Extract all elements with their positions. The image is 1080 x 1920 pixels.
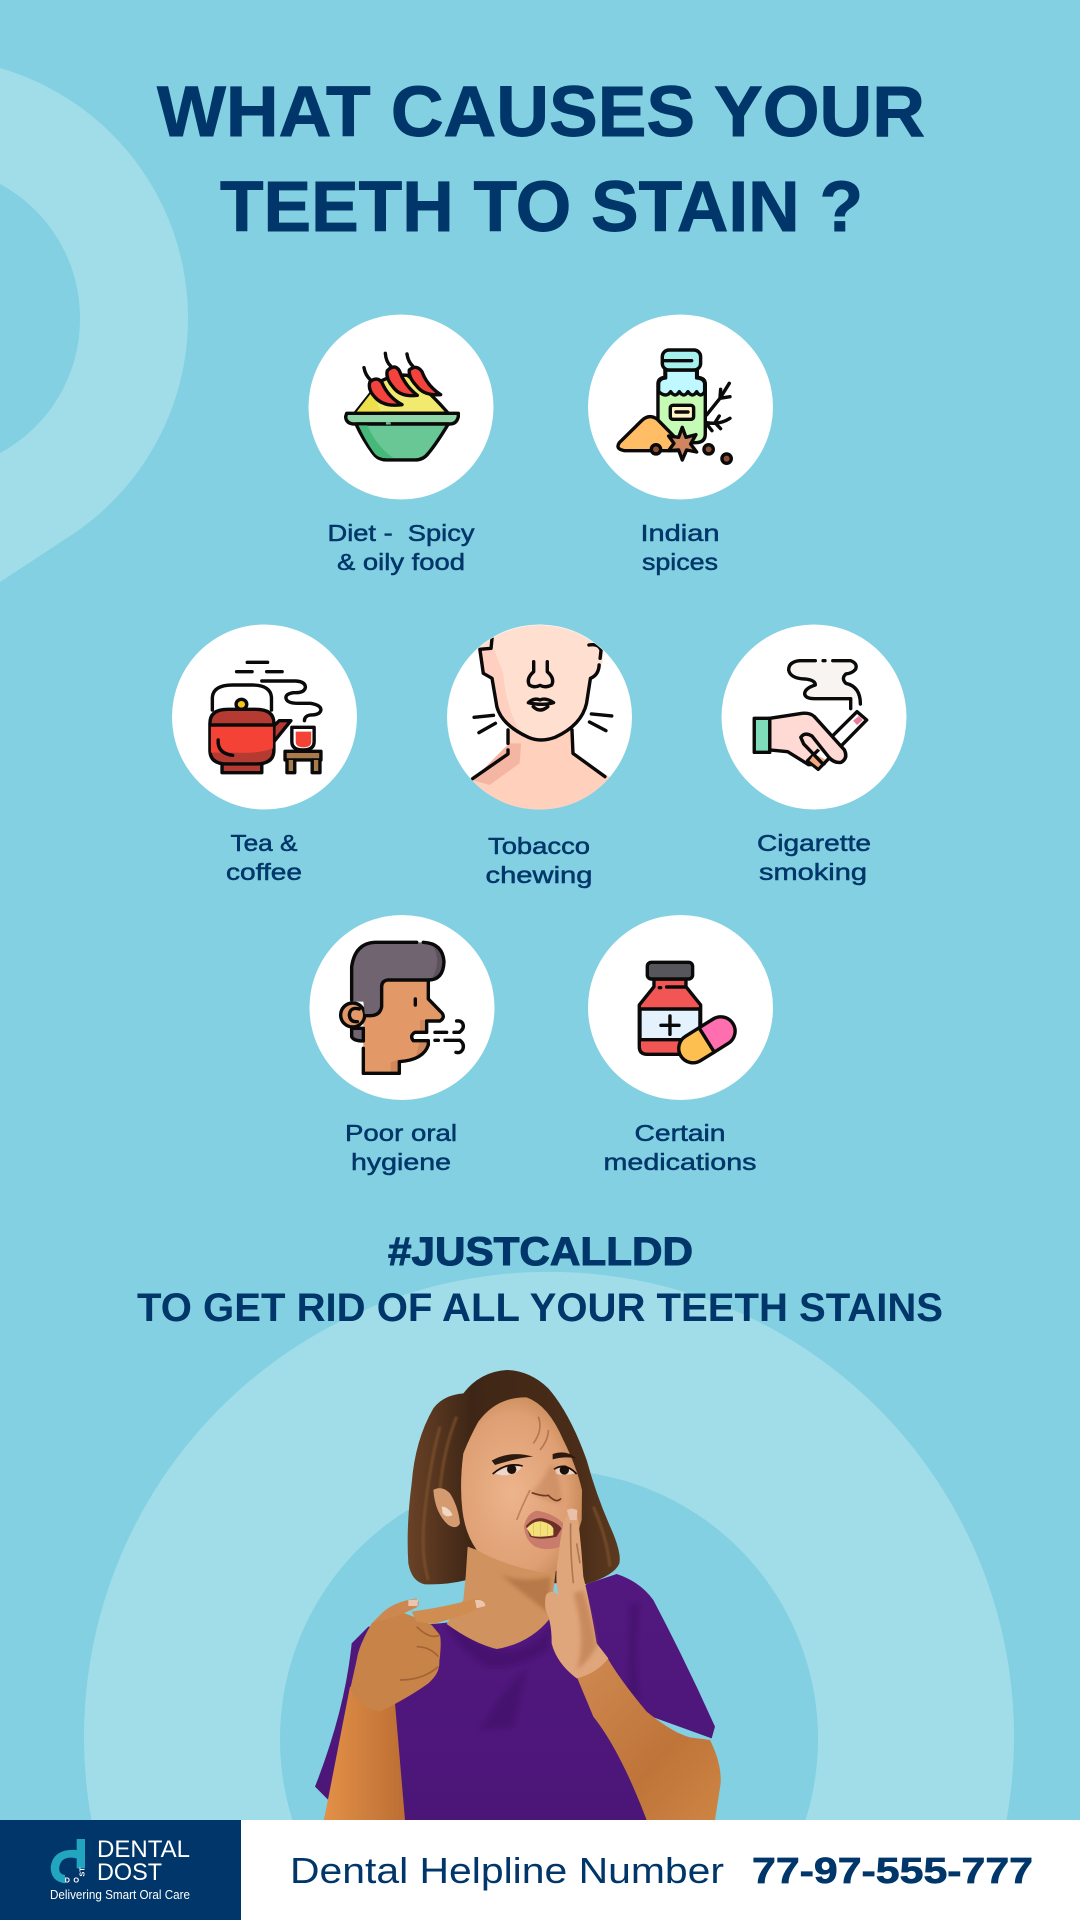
logo mark: ST [78, 1867, 87, 1877]
label: Indian spices: spices [642, 549, 718, 575]
pointing fist [350, 1612, 441, 1712]
label: tobacco chewing: Tobacco [488, 833, 590, 859]
logo panel: Delivering Smart Oral Care [50, 1888, 190, 1902]
logo mark: O [73, 1875, 79, 1884]
logo panel: DOST [97, 1859, 162, 1886]
logo panel: DENTAL [97, 1836, 190, 1863]
title: TEETH TO STAIN ? [220, 168, 863, 247]
item: diet [308, 314, 494, 575]
decorative bottom rings [84, 1272, 1014, 1820]
eyebrows and eyes [492, 1452, 576, 1465]
item: tea and coffee [172, 624, 357, 885]
decorative teardrop ring top left [0, 68, 188, 582]
label: cigarette smoking: Cigarette [757, 830, 871, 856]
label: medications: medications [604, 1149, 756, 1175]
mouth with yellow teeth [524, 1511, 563, 1549]
label: tea and coffee: coffee [226, 859, 302, 885]
label: diet: & oily food [337, 549, 465, 575]
raised hand [545, 1508, 608, 1678]
call to action: TO GET RID OF ALL YOUR TEETH STAINS [137, 1286, 943, 1330]
icon circle: teapot [172, 624, 357, 810]
item: poor oral hygiene [310, 915, 494, 1175]
icon circle: spicy food bowl [308, 314, 494, 500]
icon circle: medicine bottle and pill [588, 915, 773, 1100]
logo mark: D [65, 1875, 70, 1884]
label: diet: Diet - Spicy [328, 520, 475, 546]
photo: woman pointing at stained teeth [315, 1370, 721, 1820]
hair [408, 1370, 620, 1584]
icon circle: face and neck [447, 620, 632, 817]
item: tobacco chewing [447, 620, 632, 888]
right forearm [577, 1657, 721, 1820]
face [461, 1397, 582, 1572]
icon circle: spice jar [588, 314, 773, 500]
shirt [315, 1574, 715, 1820]
call to action [137, 1230, 943, 1330]
nose [532, 1465, 561, 1503]
left forearm [324, 1687, 405, 1820]
item: cigarette smoking [722, 624, 906, 885]
ear [433, 1488, 460, 1527]
helpline: Dental Helpline Number [290, 1850, 724, 1891]
label: poor oral hygiene: hygiene [351, 1149, 451, 1175]
label: cigarette smoking: smoking [759, 859, 867, 885]
wrinkles [533, 1417, 548, 1450]
label: tobacco chewing: chewing [486, 862, 592, 888]
neck [447, 1547, 557, 1649]
item: medications [588, 915, 773, 1175]
title: WHAT CAUSES YOUR [157, 73, 925, 152]
icon circle: hand with cigarette [722, 624, 906, 810]
item: Indian spices [588, 314, 773, 575]
title [157, 73, 925, 247]
logo panel [0, 1820, 241, 1920]
label: poor oral hygiene: Poor oral [345, 1120, 457, 1146]
label: medications: Certain [634, 1120, 726, 1146]
logo mark [51, 1839, 87, 1884]
call to action: #JUSTCALLDD [388, 1230, 693, 1274]
label: tea and coffee: Tea & [230, 830, 298, 856]
footer [0, 1820, 1080, 1920]
label: Indian spices: Indian [640, 520, 720, 546]
footer: 77-97-555-777 [752, 1850, 1033, 1891]
icon circle: man with bad breath [310, 915, 494, 1100]
